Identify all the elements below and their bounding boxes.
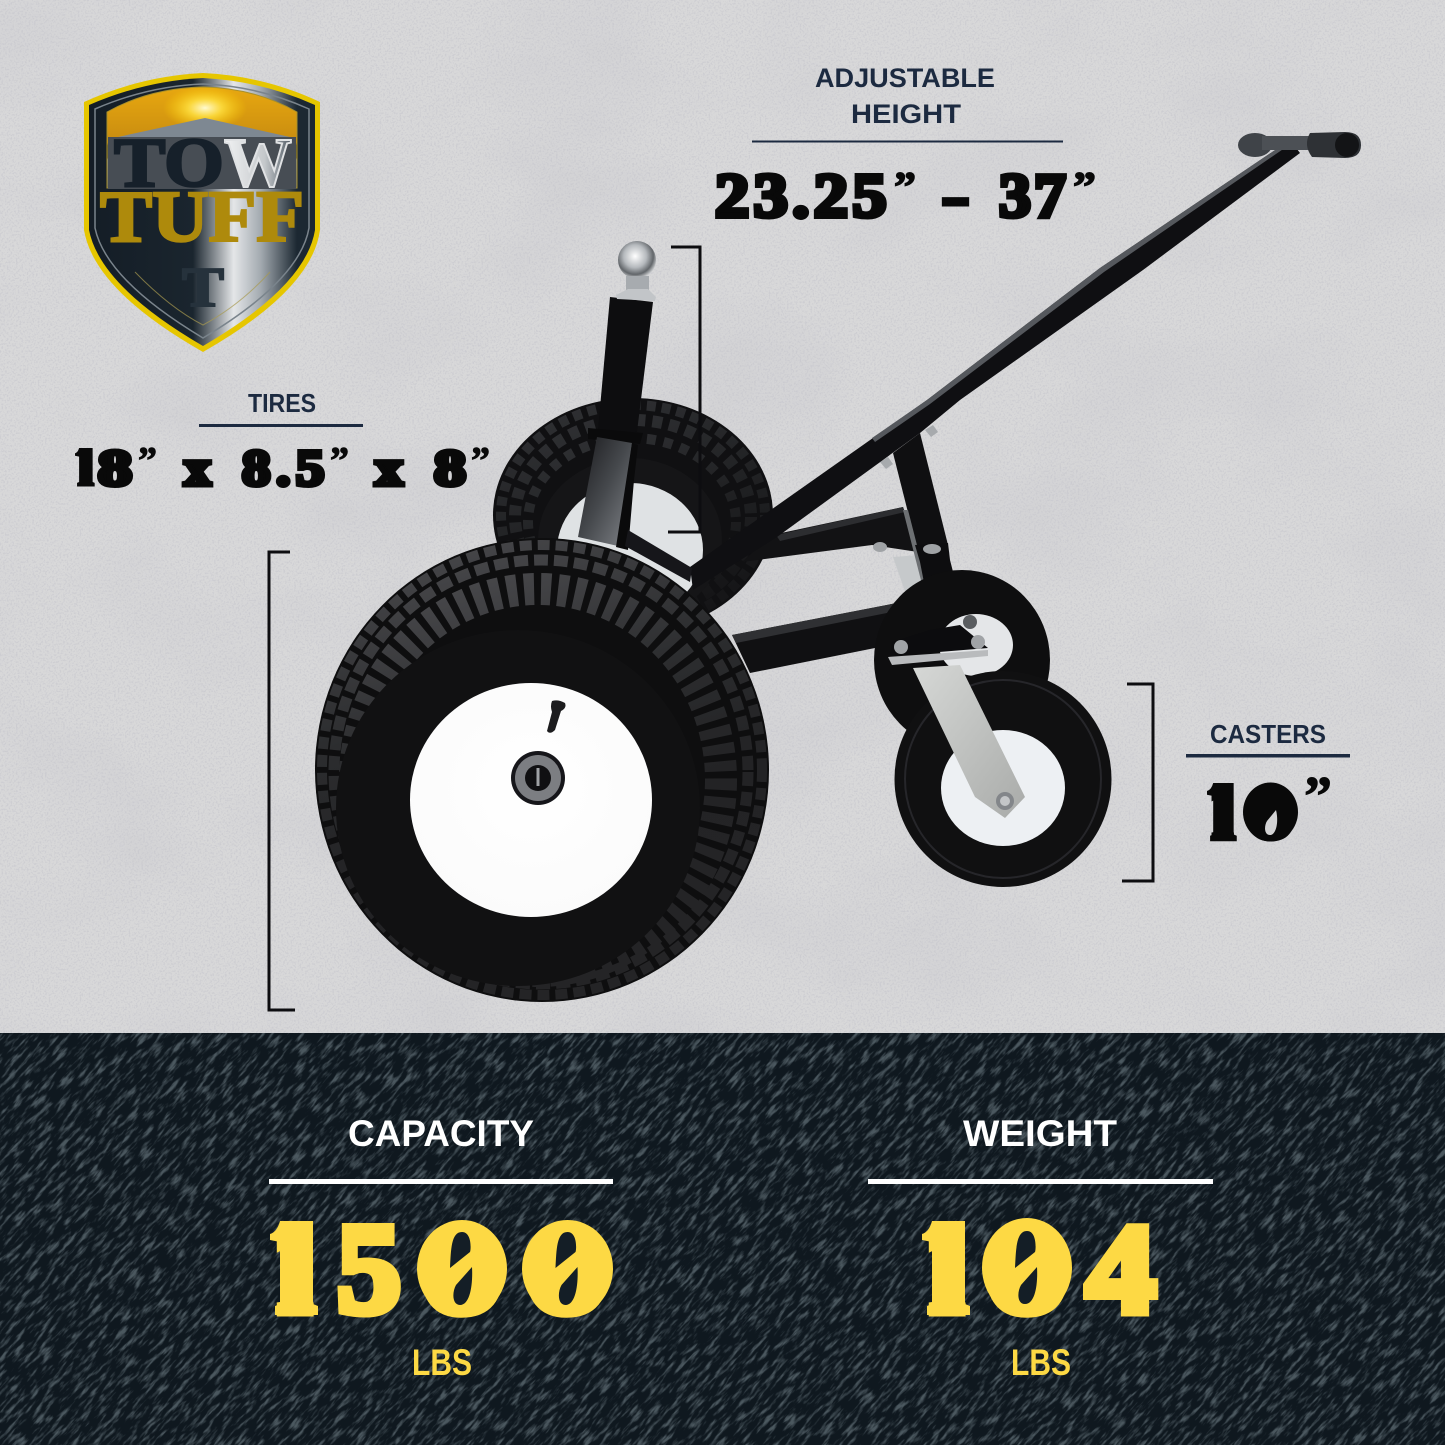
tire sidewall bbox=[336, 630, 700, 986]
value: height range bbox=[715, 162, 1096, 230]
rear hub bbox=[557, 483, 703, 617]
capacity spec bbox=[269, 1113, 613, 1383]
valve slot bbox=[547, 700, 566, 733]
value: caster size: 1 bbox=[1209, 768, 1235, 855]
caster mounting plate bbox=[888, 650, 988, 665]
heading: adjustable height: HEIGHT bbox=[851, 99, 962, 129]
logo text: TOW bbox=[114, 125, 292, 202]
logo: Tow Tuff shield bbox=[84, 73, 320, 352]
capacity spec: 0 bbox=[420, 1198, 504, 1340]
bracket: tire diameter bbox=[269, 552, 295, 1010]
heading: tires: TIRES bbox=[248, 388, 316, 418]
silver caster mount bbox=[893, 555, 927, 600]
dolly frame bbox=[732, 425, 962, 673]
value: tire size: 8 bbox=[434, 441, 466, 497]
value: caster size: 0 bbox=[1246, 768, 1296, 855]
lower cross bar bbox=[732, 597, 945, 673]
value: caster size: ” bbox=[1304, 766, 1332, 828]
value: tire size: 8 bbox=[98, 441, 132, 497]
logo text: TUFF: TUFF bbox=[100, 176, 304, 257]
value: height range: ” bbox=[894, 165, 916, 211]
lower glossy sleeve bbox=[578, 437, 632, 546]
post shaft bbox=[598, 297, 653, 432]
axle bearing bbox=[511, 751, 565, 805]
value: tire size: ” bbox=[330, 440, 349, 482]
value: height range: 23.25 bbox=[715, 162, 891, 230]
capacity spec: 1 bbox=[273, 1198, 315, 1340]
panel: bottom specs bbox=[0, 1033, 1445, 1445]
handle grip bbox=[1238, 132, 1361, 158]
upper cross bar bbox=[742, 507, 918, 562]
post collar bbox=[588, 428, 643, 444]
weight spec bbox=[868, 1113, 1213, 1383]
weight spec: LBS bbox=[1011, 1342, 1071, 1383]
vertical strut bbox=[893, 433, 948, 548]
value: tire size: x bbox=[375, 441, 404, 497]
capacity spec: 5 bbox=[337, 1198, 401, 1340]
value: tire size: 8.5 bbox=[242, 441, 330, 497]
value: height range: 37 bbox=[999, 162, 1069, 230]
value: tire size: x bbox=[184, 441, 212, 497]
weight spec: 1 bbox=[925, 1198, 967, 1340]
joint block bbox=[915, 543, 962, 638]
heading: tires bbox=[75, 388, 490, 497]
weight spec: 4 bbox=[1086, 1198, 1156, 1340]
bracket: hitch height bbox=[668, 247, 700, 532]
caster hub bbox=[941, 730, 1065, 846]
diagonal arm bbox=[625, 530, 692, 582]
logo small T mark: T bbox=[182, 257, 224, 319]
heading: casters: CASTERS bbox=[1210, 719, 1326, 749]
weight spec: WEIGHT bbox=[963, 1113, 1117, 1154]
large front tire bbox=[315, 538, 769, 1002]
value: caster size bbox=[1207, 766, 1332, 855]
value: tire size: ” bbox=[138, 440, 157, 482]
weight spec: 0 bbox=[985, 1198, 1069, 1340]
background: concrete wall bbox=[0, 0, 1445, 1040]
logo text: TOW: TO bbox=[114, 125, 224, 202]
heading: adjustable height: ADJUSTABLE bbox=[815, 63, 995, 93]
capacity spec: LBS bbox=[412, 1342, 472, 1383]
value: tire size: ” bbox=[471, 440, 490, 482]
heading: adjustable height bbox=[715, 63, 1096, 230]
caster fork bbox=[913, 665, 1025, 818]
bolts bbox=[880, 425, 938, 469]
value: tire size bbox=[75, 440, 490, 497]
front caster wheel bbox=[894, 665, 1112, 887]
capacity spec: CAPACITY bbox=[348, 1113, 534, 1154]
rear tire bbox=[493, 398, 773, 632]
value: height range: – bbox=[943, 162, 968, 230]
rear caster wheel bbox=[874, 570, 1050, 750]
white hub bbox=[410, 683, 652, 917]
logo text: TOW: W bbox=[224, 125, 292, 202]
bracket: caster diameter bbox=[1122, 684, 1153, 881]
value: height range: ” bbox=[1073, 165, 1096, 211]
capacity spec: 0 bbox=[525, 1198, 609, 1340]
hitch post with ball bbox=[578, 241, 692, 582]
heading: casters bbox=[1186, 719, 1350, 855]
dolly handle bbox=[690, 132, 1361, 590]
